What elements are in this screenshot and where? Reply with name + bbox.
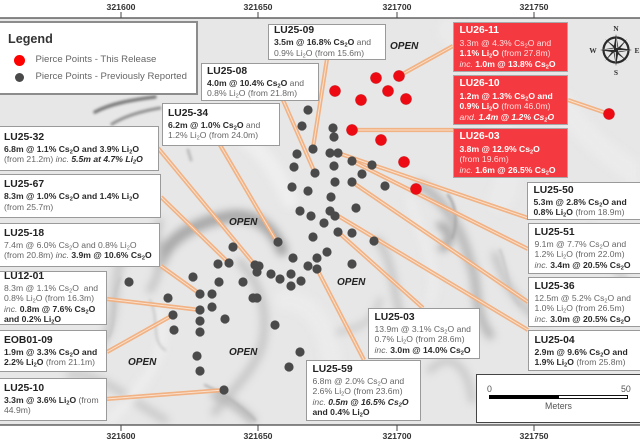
open label: OPEN <box>337 277 365 288</box>
callout: LU25-08: 0.8% Li2O (from 21.8m) <box>207 88 297 100</box>
icon: compass rose: E <box>634 46 640 55</box>
axis labels: 321650 <box>244 431 272 441</box>
callout: LU25-18: LU25-18 <box>4 228 44 238</box>
callout: LU25-36: 1.0% Li2O (from 26.5m) <box>534 303 625 314</box>
callout: LU25-36: LU25-36 <box>534 280 575 292</box>
callout: EOB01-09: 2.2% Li2O (from 21.1m) <box>4 357 95 368</box>
callout: LU25-59: inc. 0.5m @ 16.5% Cs2O <box>312 396 409 408</box>
callout: LU25-67: (from 25.7m) <box>4 202 53 212</box>
callout: LU26-11: LU26-11 <box>460 24 499 36</box>
callout: LU25-50 <box>527 182 640 220</box>
callout: LU25-36 <box>528 277 640 327</box>
callout: LU25-10: 44.9m) <box>4 405 31 415</box>
callout: LU25-34: 1.2% Li2O (from 24.0m) <box>168 130 258 142</box>
callout: LU26-10 <box>453 75 568 125</box>
callout: LU25-59: and 0.4% Li2O <box>312 407 370 418</box>
callout: LU26-03: 3.8m @ 12.9% Cs2O <box>460 144 540 155</box>
callout: LU25-04: 1.9% Li2O (from 25.8m) <box>534 357 626 368</box>
callout: LU25-03: 0.7% Li2O (from 28.6m) <box>374 334 465 346</box>
open label: OPEN <box>229 347 257 358</box>
axis labels: 321650 <box>244 2 272 12</box>
callout: LU25-09: LU25-09 <box>274 25 314 36</box>
icon: compass rose: W <box>589 46 597 55</box>
callout: LU12-01: inc. 0.8m @ 7.6% Cs2O <box>4 304 95 315</box>
callout: LU26-10: 1.2m @ 1.3% Cs2O and <box>460 90 553 102</box>
legend heading: Legend <box>8 32 53 46</box>
callout: LU26-03: inc. 1.6m @ 26.5% Cs2O <box>460 165 556 176</box>
callout: LU26-11: 3.3m @ 4.3% Cs2O and <box>460 38 551 49</box>
callout: LU25-03: LU25-03 <box>374 312 415 322</box>
callout: LU25-18: 7.4m @ 6.0% Cs2O and 0.8% Li2O <box>4 240 136 251</box>
callout: LU26-03 <box>453 128 568 178</box>
callout: LU25-50: 5.3m @ 2.8% Cs2O and <box>534 196 627 208</box>
previously reported pierce points <box>124 105 390 395</box>
callout: LU25-67: LU25-67 <box>4 179 44 190</box>
callout: LU25-18 <box>0 223 160 267</box>
callout: LU25-32 <box>0 126 159 171</box>
callout: LU25-10: LU25-10 <box>4 382 44 394</box>
callout: LU25-51: LU25-51 <box>534 226 575 238</box>
callout: LU25-04 <box>528 330 640 371</box>
callout: LU25-36: 12.5m @ 5.2% Cs2O and <box>534 292 631 304</box>
callout: LU25-51 <box>528 223 640 274</box>
callout: LU25-03 <box>368 308 480 359</box>
scale bar <box>476 374 640 423</box>
callout: LU25-34: 6.2m @ 1.0% Cs2O and <box>168 120 260 131</box>
open label: OPEN <box>390 41 418 52</box>
callout: LU25-59: 6.8m @ 2.0% Cs2O and <box>312 376 404 387</box>
this release pierce points <box>329 70 615 195</box>
callout: LU25-08 <box>201 63 319 101</box>
callout: LU26-11: inc. 1.0m @ 13.8% Cs2O <box>460 59 556 70</box>
axis labels: 321600 <box>106 431 136 441</box>
scale bar: 50 <box>621 384 631 394</box>
callout: LU26-11 <box>453 22 568 72</box>
callout: LU25-34 <box>162 103 280 146</box>
axis labels: 321750 <box>520 2 548 12</box>
callout: LU12-01: 8.3m @ 1.1% Cs2O and <box>4 282 98 294</box>
callout: LU25-03: 13.9m @ 3.1% Cs2O and <box>374 324 471 335</box>
callout: LU25-09: 3.5m @ 16.8% Cs2O and <box>274 37 371 48</box>
callout: EOB01-09: EOB01-09 <box>4 334 53 346</box>
callout: LU25-03: inc. 3.0m @ 14.0% Cs2O <box>374 344 471 356</box>
callout: LU25-51: 1.2% Li2O (from 22.0m) <box>534 249 625 260</box>
callout: LU25-59 <box>306 360 421 421</box>
callout: LU25-50: LU25-50 <box>534 184 574 196</box>
legend <box>0 21 198 95</box>
callout: LU25-08: 4.0m @ 10.4% Cs2O and <box>207 78 304 89</box>
scale bar: 0 <box>487 384 492 394</box>
callout: LU25-59: LU25-59 <box>312 364 353 374</box>
callout: LU25-67: 8.3m @ 1.0% Cs2O and 1.4% Li2O <box>4 191 139 202</box>
callout: LU25-08: LU25-08 <box>207 66 247 76</box>
callout: LU25-51: inc. 3.4m @ 20.5% Cs2O <box>534 260 631 271</box>
callout: LU25-51: 9.1m @ 7.7% Cs2O and <box>534 238 626 250</box>
axis labels: 321600 <box>106 2 136 12</box>
callout: EOB01-09: 1.9m @ 3.3% Cs2O and <box>4 346 97 358</box>
callout: LU25-32: LU25-32 <box>4 132 44 142</box>
callout: LU26-11: 1.1% Li2O (from 27.8m) <box>460 48 551 60</box>
legend item: previously reported: Pierce Points - Previously Reported <box>36 71 187 82</box>
callout: LU26-03: (from 19.6m) <box>460 154 509 164</box>
callout: LU25-10 <box>0 378 107 421</box>
callout: LU12-01 <box>0 271 107 325</box>
callout: LU26-03: LU26-03 <box>460 130 500 142</box>
callout: LU25-09 <box>268 24 386 60</box>
callout: LU25-32: (from 21.2m) inc. 5.5m at 4.7% Li2O <box>4 154 143 166</box>
axis labels: 321700 <box>382 2 412 12</box>
icon: compass rose: S <box>614 68 618 77</box>
axis labels: 321750 <box>520 431 548 441</box>
callout: LU25-09: 0.9% Li2O (from 15.6m) <box>274 48 364 59</box>
icon: compass rose: N <box>613 24 619 33</box>
callout: LU25-10: 3.3m @ 3.6% Li2O (from <box>4 394 99 406</box>
callout: LU26-10: LU26-10 <box>460 78 500 88</box>
open label: OPEN <box>229 217 257 228</box>
callout: LU25-36: inc. 3.0m @ 20.5% Cs2O <box>534 314 631 325</box>
callout: LU26-10: and. 1.4m @ 1.2% Cs2O <box>460 112 554 123</box>
scale bar: Meters <box>545 401 572 411</box>
callout: LU12-01: 0.8% Li2O (from 16.3m) <box>4 293 94 304</box>
callout: LU25-04: 2.9m @ 9.6% Cs2O and <box>534 346 628 358</box>
callout: EOB01-09 <box>0 330 107 372</box>
callout: LU25-34: LU25-34 <box>168 108 208 118</box>
callout: LU25-59: 2.6% Li2O (from 23.6m) <box>312 386 403 398</box>
leader lines <box>106 46 609 399</box>
callout: LU25-04: LU25-04 <box>534 334 575 346</box>
axis labels: 321700 <box>382 431 412 441</box>
callout: LU25-67 <box>0 174 161 218</box>
callout: LU25-50: 0.8% Li2O (from 18.9m) <box>534 207 625 218</box>
callout: LU26-10: 0.9% Li2O (from 46.0m) <box>460 101 551 113</box>
open label: OPEN <box>128 357 156 368</box>
legend item: this release: Pierce Points - This Release <box>36 54 156 65</box>
icon: compass rose <box>589 24 640 77</box>
callout: LU25-18: (from 20.8m) inc. 3.9m @ 10.6% Cs2O <box>4 250 152 262</box>
callout: LU25-32: 6.8m @ 1.1% Cs2O and 3.9% Li2O <box>4 144 139 155</box>
